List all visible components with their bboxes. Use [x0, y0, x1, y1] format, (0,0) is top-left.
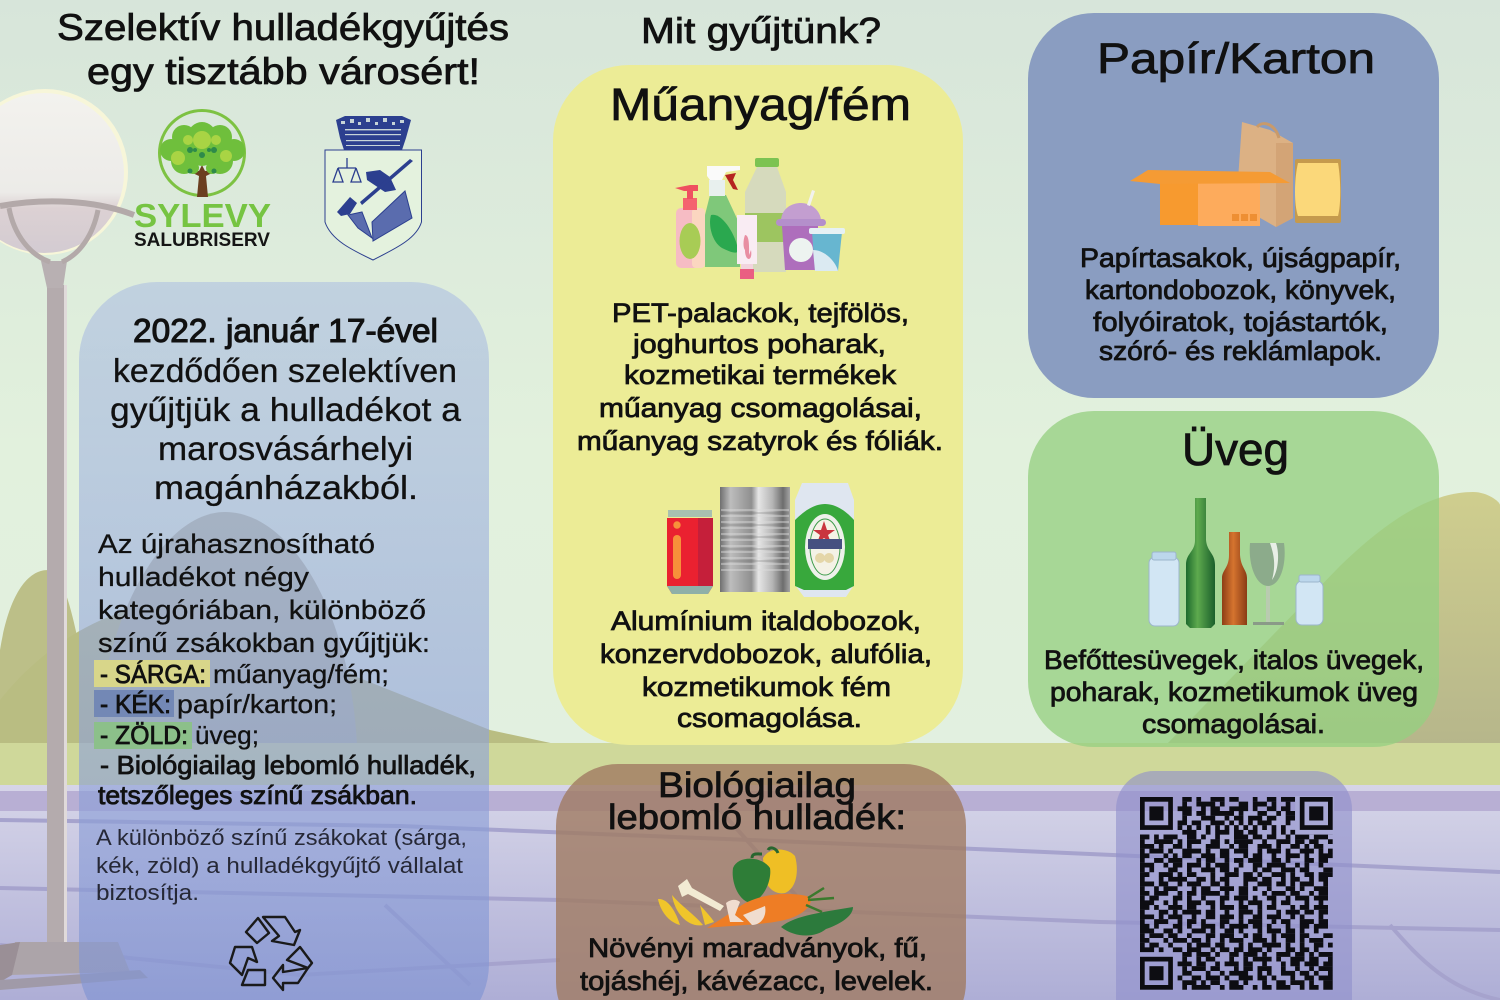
milk bottle: [745, 158, 786, 272]
metal text: kozmetikumok fém: [642, 672, 891, 702]
yogurt cup: [809, 228, 845, 271]
left hills: [0, 512, 560, 745]
legend: biodegradable: [98, 750, 476, 810]
hand and sword: [337, 159, 413, 216]
glass text: csomagolásai.: [1142, 709, 1325, 739]
green wine bottle: [1186, 498, 1215, 628]
red can: [667, 510, 713, 594]
legend: blue: papír/karton;: [177, 689, 337, 719]
small note: kék, zöld) a hulladékgyűjtő vállalat: [96, 853, 463, 878]
icon: glass items: [1149, 498, 1323, 628]
title: [57, 7, 509, 92]
title: Szelektív hulladékgyűjtés: [57, 7, 509, 48]
lamp neck: [41, 261, 67, 288]
lamp pole: [47, 285, 64, 945]
ground band: [0, 743, 1500, 785]
intro paragraph: Az újrahasznosítható: [98, 529, 375, 559]
paper bag: [1238, 122, 1293, 227]
panel heading: Biológiailag: [658, 766, 856, 805]
intro paragraph: kategóriában, különböző: [98, 595, 426, 625]
plastic text: műanyag csomagolásai,: [599, 393, 922, 423]
legend: yellow: műanyag/fém;: [213, 659, 389, 689]
plastic text: [577, 298, 943, 456]
metal text: Alumínium italdobozok,: [611, 606, 921, 636]
icon: organic waste: [658, 848, 853, 936]
panel heading: Papír/Karton: [1097, 35, 1375, 83]
street lamp: [0, 89, 148, 990]
soap bottle: [675, 185, 705, 268]
intro heading: [110, 312, 462, 506]
banana peel: [658, 895, 714, 925]
legend: blue: - KÉK:: [100, 689, 171, 719]
legend: green: üveg;: [195, 720, 259, 750]
leafy greens: [781, 907, 853, 936]
legend: biodegradable: - Biológiailag lebomló hulladék,: [100, 750, 476, 780]
panel heading: Üveg: [1182, 424, 1289, 475]
wine glass: [1250, 543, 1285, 625]
spray bottle: [705, 166, 740, 267]
legend: green: [94, 720, 259, 750]
jar: [1149, 552, 1179, 626]
logo: city coat of arms: [325, 116, 422, 260]
glass text: [1044, 645, 1424, 739]
icon: metal cans: [667, 483, 854, 597]
legend: green: - ZÖLD:: [100, 720, 188, 750]
panel heading: lebomló hulladék:: [608, 798, 906, 837]
paper text: Papírtasakok, újságpapír,: [1080, 243, 1401, 273]
intro heading: 2022. január 17-ével: [133, 312, 438, 349]
paper text: folyóiratok, tojástartók,: [1093, 307, 1388, 337]
snack pack: [1295, 159, 1341, 223]
plastic text: joghurtos poharak,: [632, 329, 886, 359]
biodegradable text: tojáshéj, kávézacc, levelek.: [580, 966, 933, 996]
panel: glass: [1028, 411, 1439, 747]
lamp base: [0, 942, 148, 990]
logo wordmark: [134, 197, 271, 251]
small jar: [1296, 575, 1323, 625]
glass text: Befőttesüvegek, italos üvegek,: [1044, 645, 1424, 675]
intro paragraph: hulladékot négy: [98, 562, 310, 592]
small note: A különböző színű zsákokat (sárga,: [96, 825, 467, 850]
cardboard box: [1130, 170, 1290, 226]
legend: yellow: [94, 659, 389, 689]
QR finder top right: [1295, 796, 1334, 835]
metal text: konzervdobozok, alufólia,: [600, 639, 932, 669]
panel heading: Műanyag/fém: [610, 79, 911, 130]
purple cup: [776, 190, 826, 270]
biodegradable text: [580, 933, 933, 996]
green beer can: [795, 483, 854, 597]
logo ring: [160, 110, 244, 196]
column heading: Mit gyűjtünk?: [641, 10, 881, 51]
tin can: [720, 487, 790, 592]
icon: recycle: [230, 917, 312, 990]
panel heading: [608, 766, 906, 837]
scales: [333, 158, 361, 182]
lamp globe: [0, 89, 128, 255]
intro heading: kezdődően szelektíven: [113, 352, 457, 389]
logo: Sylevy Salubriserv: [134, 110, 271, 251]
intro heading: magánházakból.: [154, 469, 418, 506]
panel: QR code: [1116, 771, 1352, 1000]
small note: [96, 825, 467, 905]
logo wordmark: SALUBRISERV: [134, 230, 270, 251]
icon: paper items: [1130, 122, 1341, 227]
intro heading: marosvásárhelyi: [158, 430, 413, 467]
QR finder top left: [1142, 799, 1171, 828]
panel: intro text (left): [79, 282, 489, 1000]
crown: [336, 116, 411, 150]
metal text: [600, 606, 932, 733]
title: egy tisztább városért!: [87, 51, 480, 92]
paper text: szóró- és reklámlapok.: [1099, 336, 1382, 366]
paper text: kartondobozok, könyvek,: [1085, 275, 1396, 305]
logo tree: [160, 122, 245, 197]
plastic text: kozmetikai termékek: [624, 360, 897, 390]
panel: biodegradable: [556, 764, 966, 1000]
metal text: csomagolása.: [677, 703, 862, 733]
paper text: [1080, 243, 1401, 366]
brown bottle: [1222, 532, 1247, 625]
panel: paper/cardboard: [1028, 13, 1439, 398]
panel: plastic/metal: [553, 65, 963, 745]
intro paragraph: [98, 529, 430, 658]
egg shell: [726, 900, 765, 925]
yellow pepper: [763, 850, 797, 893]
biodegradable text: Növényi maradványok, fű,: [588, 933, 927, 963]
small note: biztosítja.: [96, 880, 199, 905]
icon: plastic containers: [675, 158, 845, 279]
right hill: [1165, 492, 1500, 746]
pavement: [0, 785, 1500, 1000]
green pepper: [733, 859, 770, 903]
legend: biodegradable: tetszőleges színű zsákban.: [98, 780, 417, 810]
legend: blue: [94, 689, 337, 719]
QR finder bottom left: [1142, 959, 1171, 987]
legend: yellow: - SÁRGA:: [100, 659, 206, 689]
lamp arm: [0, 201, 134, 262]
logo wordmark: SYLEVY: [134, 197, 271, 234]
shield: [325, 150, 422, 260]
glass text: poharak, kozmetikumok üveg: [1050, 677, 1418, 707]
stems: [752, 848, 778, 858]
carrot greens: [806, 888, 834, 912]
intro heading: gyűjtjük a hulladékot a: [110, 391, 462, 428]
intro paragraph: színű zsákokban gyűjtjük:: [98, 628, 430, 658]
book: [348, 191, 412, 241]
carrot: [707, 894, 811, 928]
QR code: [1140, 796, 1334, 987]
plastic text: műanyag szatyrok és fóliák.: [577, 426, 943, 456]
plastic text: PET-palackok, tejfölös,: [612, 298, 909, 328]
tube: [737, 215, 757, 279]
bone: [678, 879, 724, 911]
